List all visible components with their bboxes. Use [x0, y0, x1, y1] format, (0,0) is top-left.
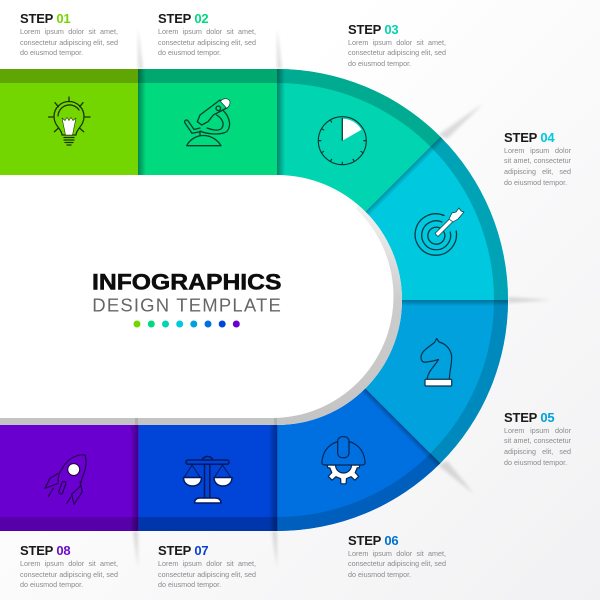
text block: step 02: consectetur adipiscing elit, sed: [158, 38, 256, 47]
text block: step 02: STEP 02: [158, 11, 208, 26]
panel: step 3 segment: [277, 69, 440, 212]
text block: step 06: do eiusmod tempor.: [348, 570, 411, 579]
panel: step 4 segment: [365, 137, 508, 300]
icon: chess knight: [421, 338, 452, 386]
panel: step 1 band: [0, 69, 138, 175]
text block: step 06: STEP 06: [348, 532, 398, 548]
text block: step 01: consectetur adipiscing elit, sed: [20, 38, 118, 47]
title: [92, 270, 282, 316]
text block: step 06: Lorem ipsum dolor sit amet,: [348, 548, 446, 558]
text block: step 04: adipiscing elit, sed: [504, 167, 571, 176]
text block: step 04: sit amet, consectetur: [504, 156, 571, 165]
panel: step 5 segment: [365, 300, 508, 463]
text block: step 08: [20, 543, 118, 589]
text block: step 05: do eiusmod tempor.: [504, 458, 567, 467]
text block: step 03: consectetur adipiscing elit, sed: [348, 48, 446, 57]
text block: step 03: Lorem ipsum dolor sit amet,: [348, 38, 446, 46]
text block: step 07: [158, 543, 256, 589]
panel: step 2 band: [138, 69, 278, 175]
panel: step 8 band: [0, 425, 138, 531]
text block: step 05: STEP 05: [504, 410, 554, 424]
title: INFOGRAPHICS: [92, 270, 282, 294]
title: DESIGN TEMPLATE: [92, 295, 281, 316]
text block: step 03: [348, 22, 446, 68]
background seam shadows: [133, 28, 552, 568]
text block: step 04: STEP 04: [504, 130, 554, 144]
panel: step 6 segment: [277, 388, 440, 531]
rim seam shadows: [135, 418, 277, 425]
text block: step 07: do eiusmod tempor.: [158, 580, 221, 589]
text block: step 02: Lorem ipsum dolor sit amet,: [158, 27, 256, 36]
text block: step 04: do eiusmod tempor.: [504, 178, 567, 187]
icon: rocket: [45, 455, 86, 504]
icon: balance scales: [184, 456, 232, 503]
step colour dots: [134, 320, 240, 328]
text block: step 08: STEP 08: [20, 543, 70, 558]
icon: light bulb: [48, 97, 90, 145]
text block: step 02: do eiusmod tempor.: [158, 48, 221, 57]
text block: step 07: Lorem ipsum dolor sit amet,: [158, 559, 256, 568]
central white panel: [0, 175, 393, 418]
text block: step 06: [348, 532, 446, 579]
text block: step 07: STEP 07: [158, 543, 208, 558]
text block: step 01: [20, 11, 118, 57]
text block: step 06: consectetur adipiscing elit, sed: [348, 559, 446, 568]
text block: step 08: consectetur adipiscing elit, sed: [20, 570, 118, 579]
text block: step 05: [504, 410, 571, 467]
icon: clock: [318, 117, 366, 165]
text block: step 01: STEP 01: [20, 11, 70, 26]
icon: helmet with gear: [322, 437, 365, 484]
text block: step 02: [158, 11, 256, 57]
icon: target with dart: [415, 208, 464, 255]
text block: step 03: STEP 03: [348, 22, 398, 36]
panel: step 7 band: [138, 425, 278, 531]
text block: step 08: do eiusmod tempor.: [20, 580, 83, 589]
text block: step 05: Lorem ipsum dolor: [504, 426, 571, 434]
inner grey rim: [0, 205, 402, 425]
text block: step 01: do eiusmod tempor.: [20, 48, 83, 57]
text block: step 04: [504, 130, 571, 187]
icon: microscope: [185, 99, 230, 146]
text block: step 05: sit amet, consectetur: [504, 436, 571, 445]
text block: step 01: Lorem ipsum dolor sit amet,: [20, 27, 118, 36]
text block: step 08: Lorem ipsum dolor sit amet,: [20, 559, 118, 568]
text block: step 04: Lorem ipsum dolor: [504, 146, 571, 154]
text block: step 05: adipiscing elit, sed: [504, 447, 571, 456]
text block: step 07: consectetur adipiscing elit, sed: [158, 570, 256, 579]
text block: step 03: do eiusmod tempor.: [348, 59, 411, 68]
